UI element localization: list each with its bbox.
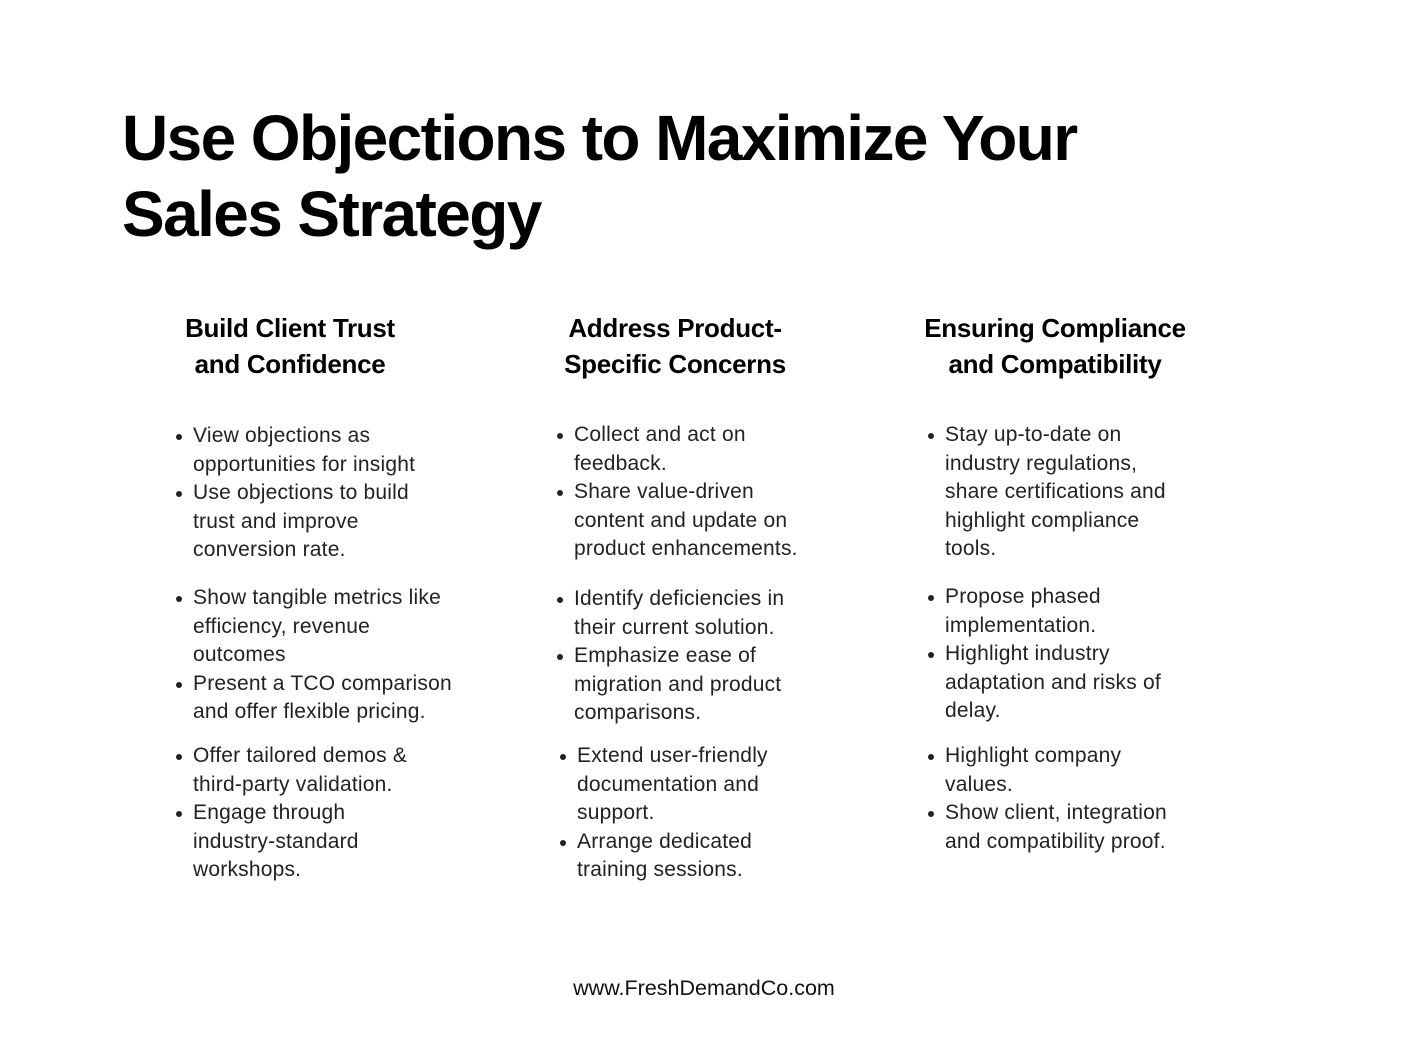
- heading: column 2: Specific Concerns: [564, 349, 786, 379]
- col1 group 2: Show tangible metrics like: [193, 586, 441, 609]
- col2 group 3: support.: [577, 801, 654, 824]
- col2 group 2: comparisons.: [574, 701, 701, 724]
- col2 group 1: product enhancements.: [574, 537, 798, 560]
- heading: column 1: [185, 313, 395, 379]
- col1 group 1: Use objections to build: [193, 481, 409, 504]
- col2 group 1: Share value-driven: [574, 480, 754, 503]
- col1 group 2: Present a TCO comparison: [193, 672, 452, 694]
- col2 group 1: feedback.: [574, 452, 667, 474]
- title: [122, 102, 1078, 250]
- col1 group 2: [176, 586, 452, 723]
- col2 group 3: [560, 744, 768, 881]
- heading: column 3: [924, 313, 1186, 379]
- col3 group 1: [928, 423, 1166, 560]
- col3 group 1: share certifications and: [945, 480, 1166, 503]
- col2 group 2: Emphasize ease of: [574, 644, 756, 667]
- col2 group 3: Arrange dedicated: [577, 830, 752, 852]
- col2 group 1: content and update on: [574, 508, 787, 532]
- col3 group 3: Highlight company: [945, 744, 1121, 767]
- col1 group 1: View objections as: [193, 424, 370, 447]
- col3 group 3: [928, 744, 1167, 852]
- col1 group 3: industry-standard: [193, 830, 359, 852]
- col2 group 2: migration and product: [574, 672, 781, 696]
- col3 group 2: delay.: [945, 699, 1001, 722]
- col1 group 1: [176, 424, 415, 561]
- col3 group 3: values.: [945, 772, 1013, 796]
- col2 group 2: Identify deficiencies in: [574, 587, 784, 610]
- col1 group 3: workshops.: [193, 858, 301, 881]
- col2 group 1: [557, 423, 798, 560]
- footer: www.FreshDemandCo.com: [573, 976, 835, 1000]
- col1 group 2: and offer flexible pricing.: [193, 700, 426, 723]
- heading: column 3: Ensuring Compliance: [924, 313, 1186, 343]
- heading: column 1: and Confidence: [195, 349, 385, 379]
- col1 group 3: Offer tailored demos &: [193, 744, 407, 767]
- col2 group 3: Extend user-friendly: [577, 744, 768, 767]
- col1 group 2: outcomes: [193, 643, 286, 666]
- col1 group 2: efficiency, revenue: [193, 614, 370, 638]
- col3 group 3: and compatibility proof.: [945, 830, 1166, 852]
- col2 group 2: their current solution.: [574, 616, 775, 638]
- col3 group 1: highlight compliance: [945, 508, 1139, 532]
- col3 group 2: adaptation and risks of: [945, 670, 1161, 694]
- heading: column 2: Address Product-: [568, 313, 782, 343]
- col3 group 2: Highlight industry: [945, 642, 1110, 665]
- heading: column 1: Build Client Trust: [185, 313, 395, 343]
- col2 group 2: [557, 587, 784, 724]
- col1 group 3: [176, 744, 407, 881]
- title: Use Objections to Maximize Your: [122, 102, 1076, 174]
- col3 group 2: Propose phased: [945, 585, 1101, 608]
- heading: column 3: and Compatibility: [948, 349, 1162, 379]
- col3 group 3: Show client, integration: [945, 801, 1167, 824]
- col3 group 1: industry regulations,: [945, 452, 1137, 474]
- col2 group 3: documentation and: [577, 772, 759, 796]
- col1 group 3: Engage through: [193, 801, 345, 824]
- col1 group 1: trust and improve: [193, 510, 359, 532]
- col1 group 3: third-party validation.: [193, 772, 393, 796]
- col2 group 3: training sessions.: [577, 858, 743, 881]
- col1 group 1: opportunities for insight: [193, 452, 415, 476]
- col3 group 2: [928, 585, 1161, 722]
- col3 group 1: tools.: [945, 537, 996, 560]
- col2 group 1: Collect and act on: [574, 423, 746, 446]
- col1 group 1: conversion rate.: [193, 538, 346, 561]
- title: Sales Strategy: [122, 178, 541, 250]
- col3 group 1: Stay up-to-date on: [945, 423, 1121, 446]
- col3 group 2: implementation.: [945, 614, 1096, 636]
- heading: column 2: [564, 313, 786, 379]
